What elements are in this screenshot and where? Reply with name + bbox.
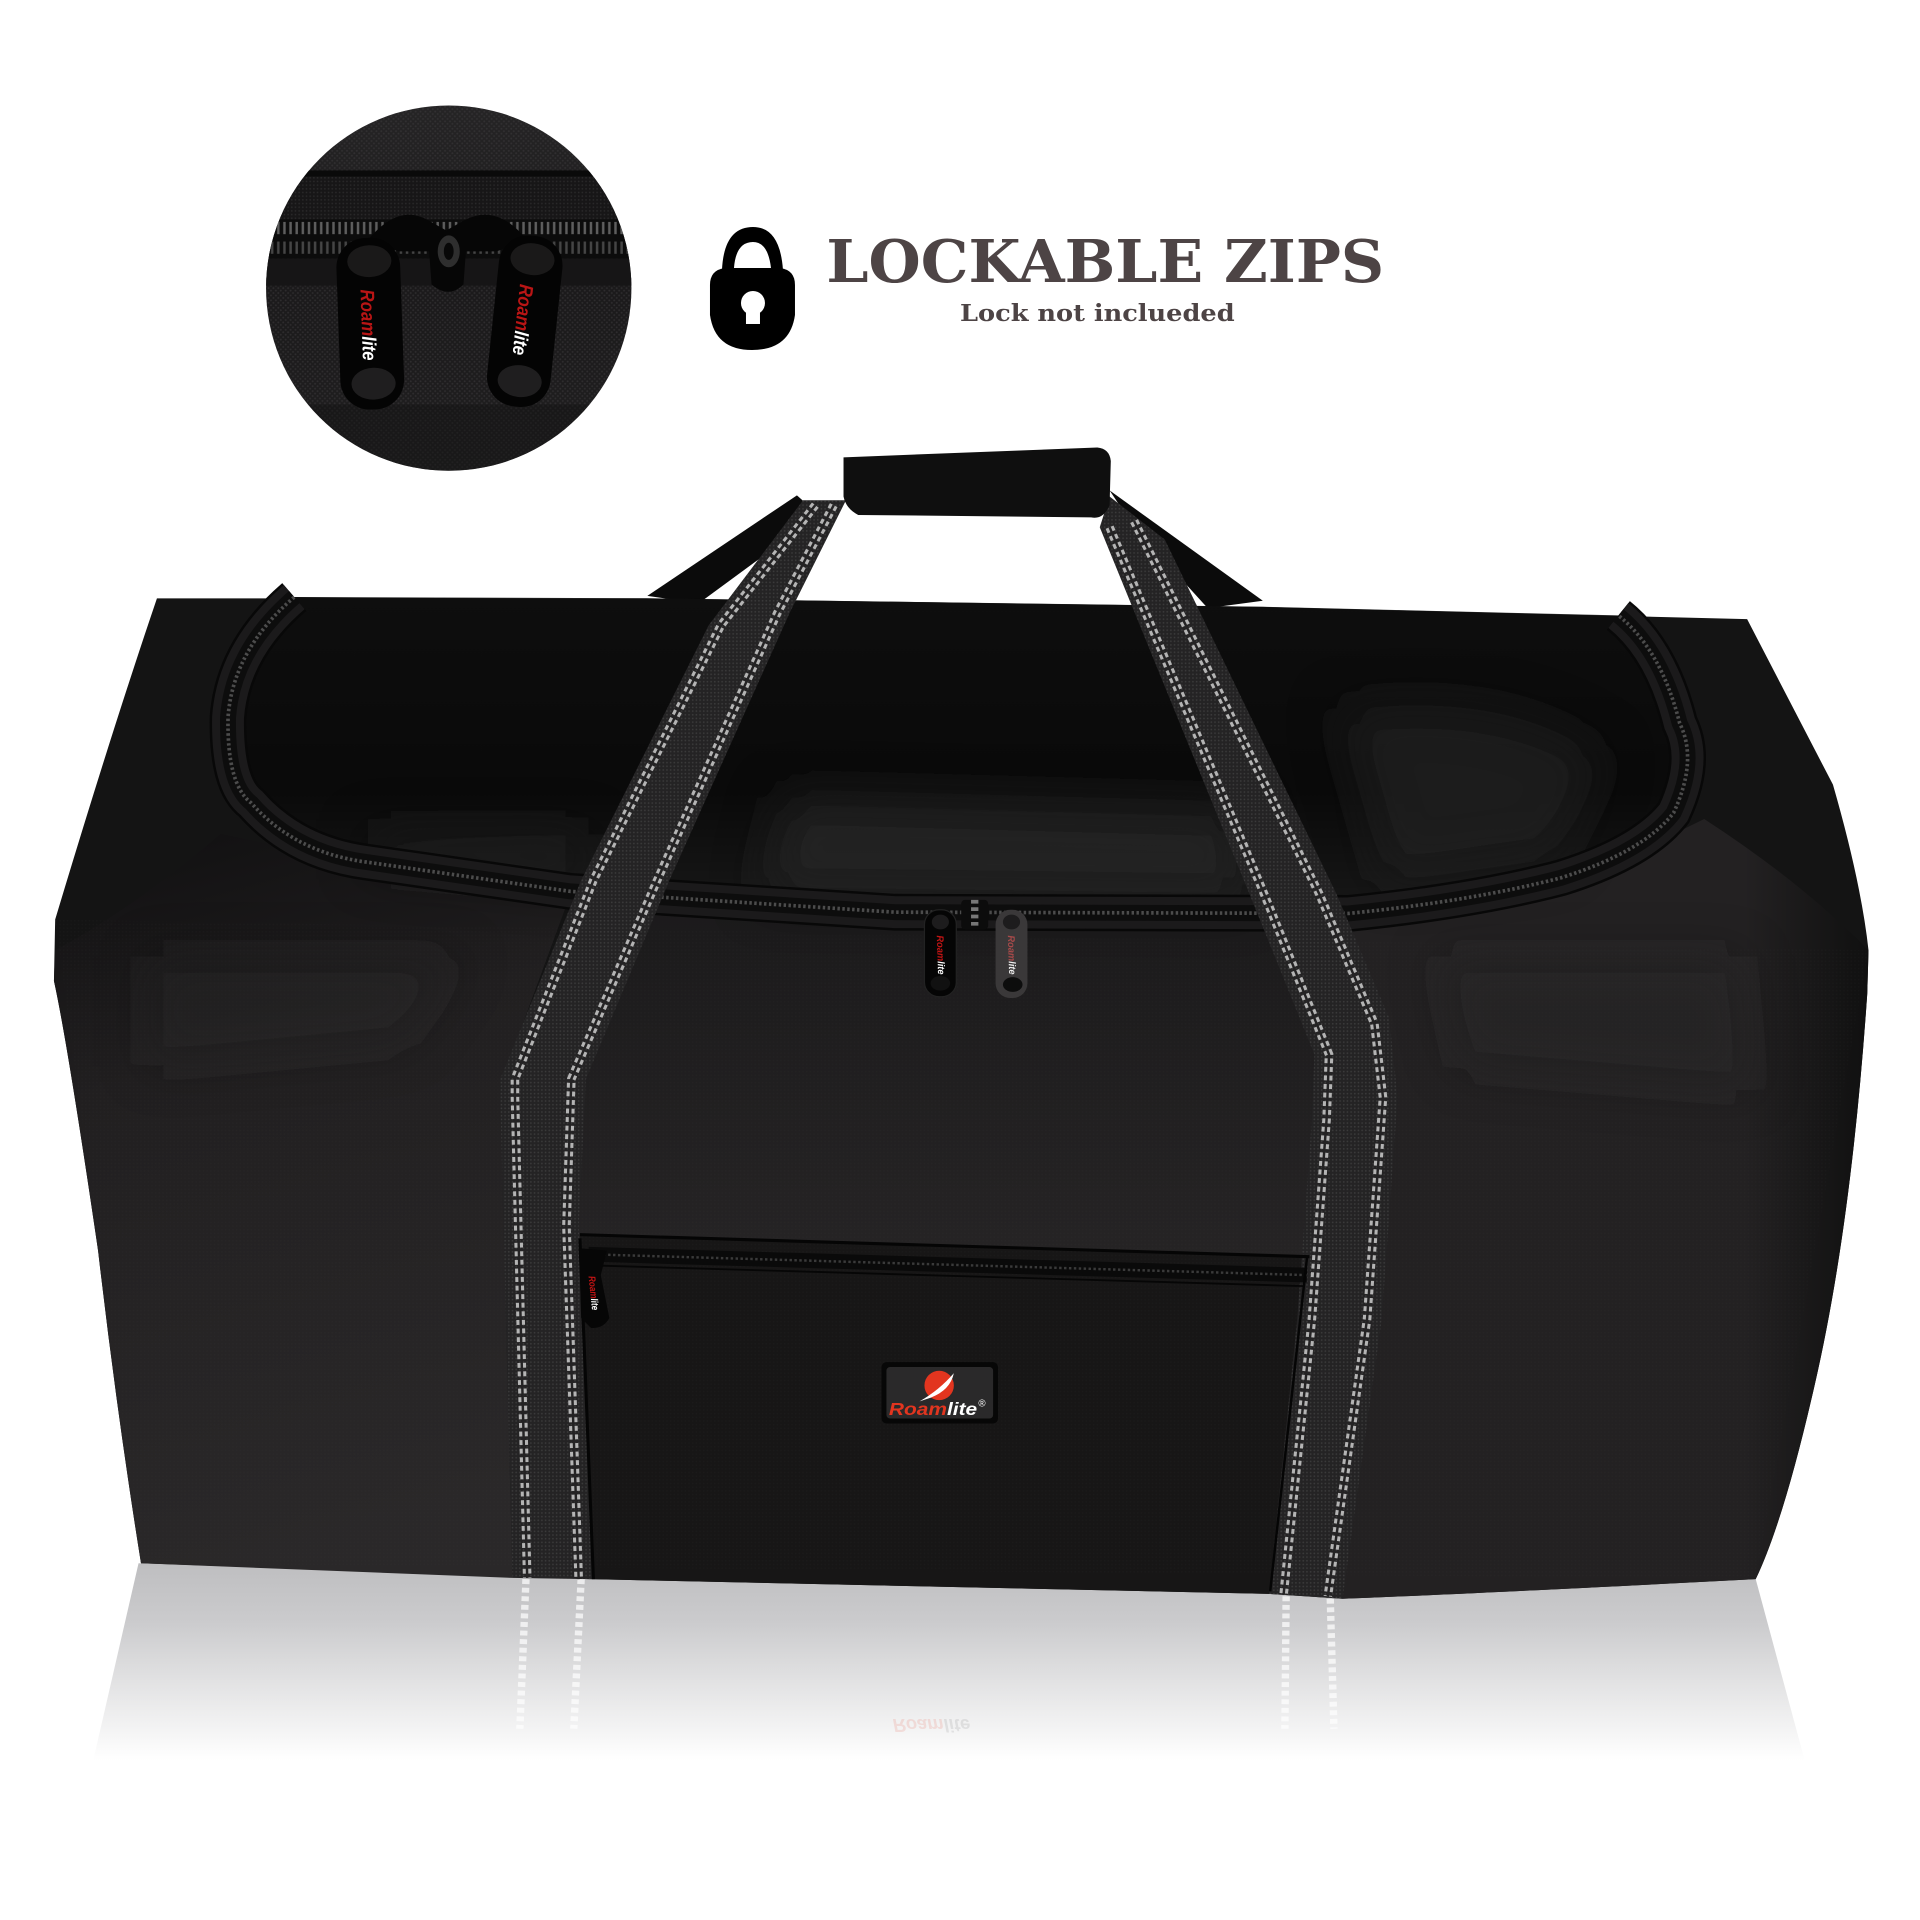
icon: padlock <box>710 227 795 350</box>
left side panel <box>54 834 570 1578</box>
zip pull left <box>335 237 405 411</box>
flap highlights <box>368 705 1606 901</box>
pocket zip pull <box>579 1248 609 1328</box>
main zipper <box>228 597 1688 913</box>
top flap <box>228 597 1688 913</box>
centre zipper slider <box>961 900 988 929</box>
bag fabric texture <box>55 920 1869 1579</box>
centre zip pull right: Roam lite <box>1005 935 1017 975</box>
logo patch: ® <box>978 1398 986 1409</box>
front pocket panel <box>580 1236 1312 1594</box>
zip pull left: Roamlite <box>355 289 380 361</box>
front panel <box>576 902 1349 1275</box>
bag body <box>54 598 1869 1599</box>
centre zip pull left: Roam lite <box>934 935 946 975</box>
right carry strap <box>1100 497 1398 1599</box>
duffel bag <box>54 448 1869 1599</box>
pocket zipper <box>580 1235 1309 1591</box>
zip pull right: Roamlite <box>508 283 537 356</box>
subheading: Lock not inclueded <box>960 300 1235 327</box>
zoom inset: zipper close-up <box>265 104 633 478</box>
centre zip pull left <box>924 910 956 997</box>
top grip <box>844 448 1111 518</box>
floor reflection: Roamlite <box>893 1715 970 1736</box>
bag back handle <box>647 490 1263 608</box>
heading: LOCKABLE ZIPS <box>826 227 1384 296</box>
logo patch <box>882 1362 998 1423</box>
pocket zip pull: Roamlite <box>586 1275 600 1311</box>
right side panel <box>1343 819 1869 1599</box>
floor reflection <box>93 1563 1805 1761</box>
left carry strap <box>500 500 846 1579</box>
logo patch: Roam lite <box>889 1399 978 1419</box>
fabric wrinkles <box>147 956 1753 1091</box>
zipper slider centre <box>368 215 527 292</box>
centre zip pull right <box>996 910 1027 998</box>
zip pull right <box>484 233 565 410</box>
